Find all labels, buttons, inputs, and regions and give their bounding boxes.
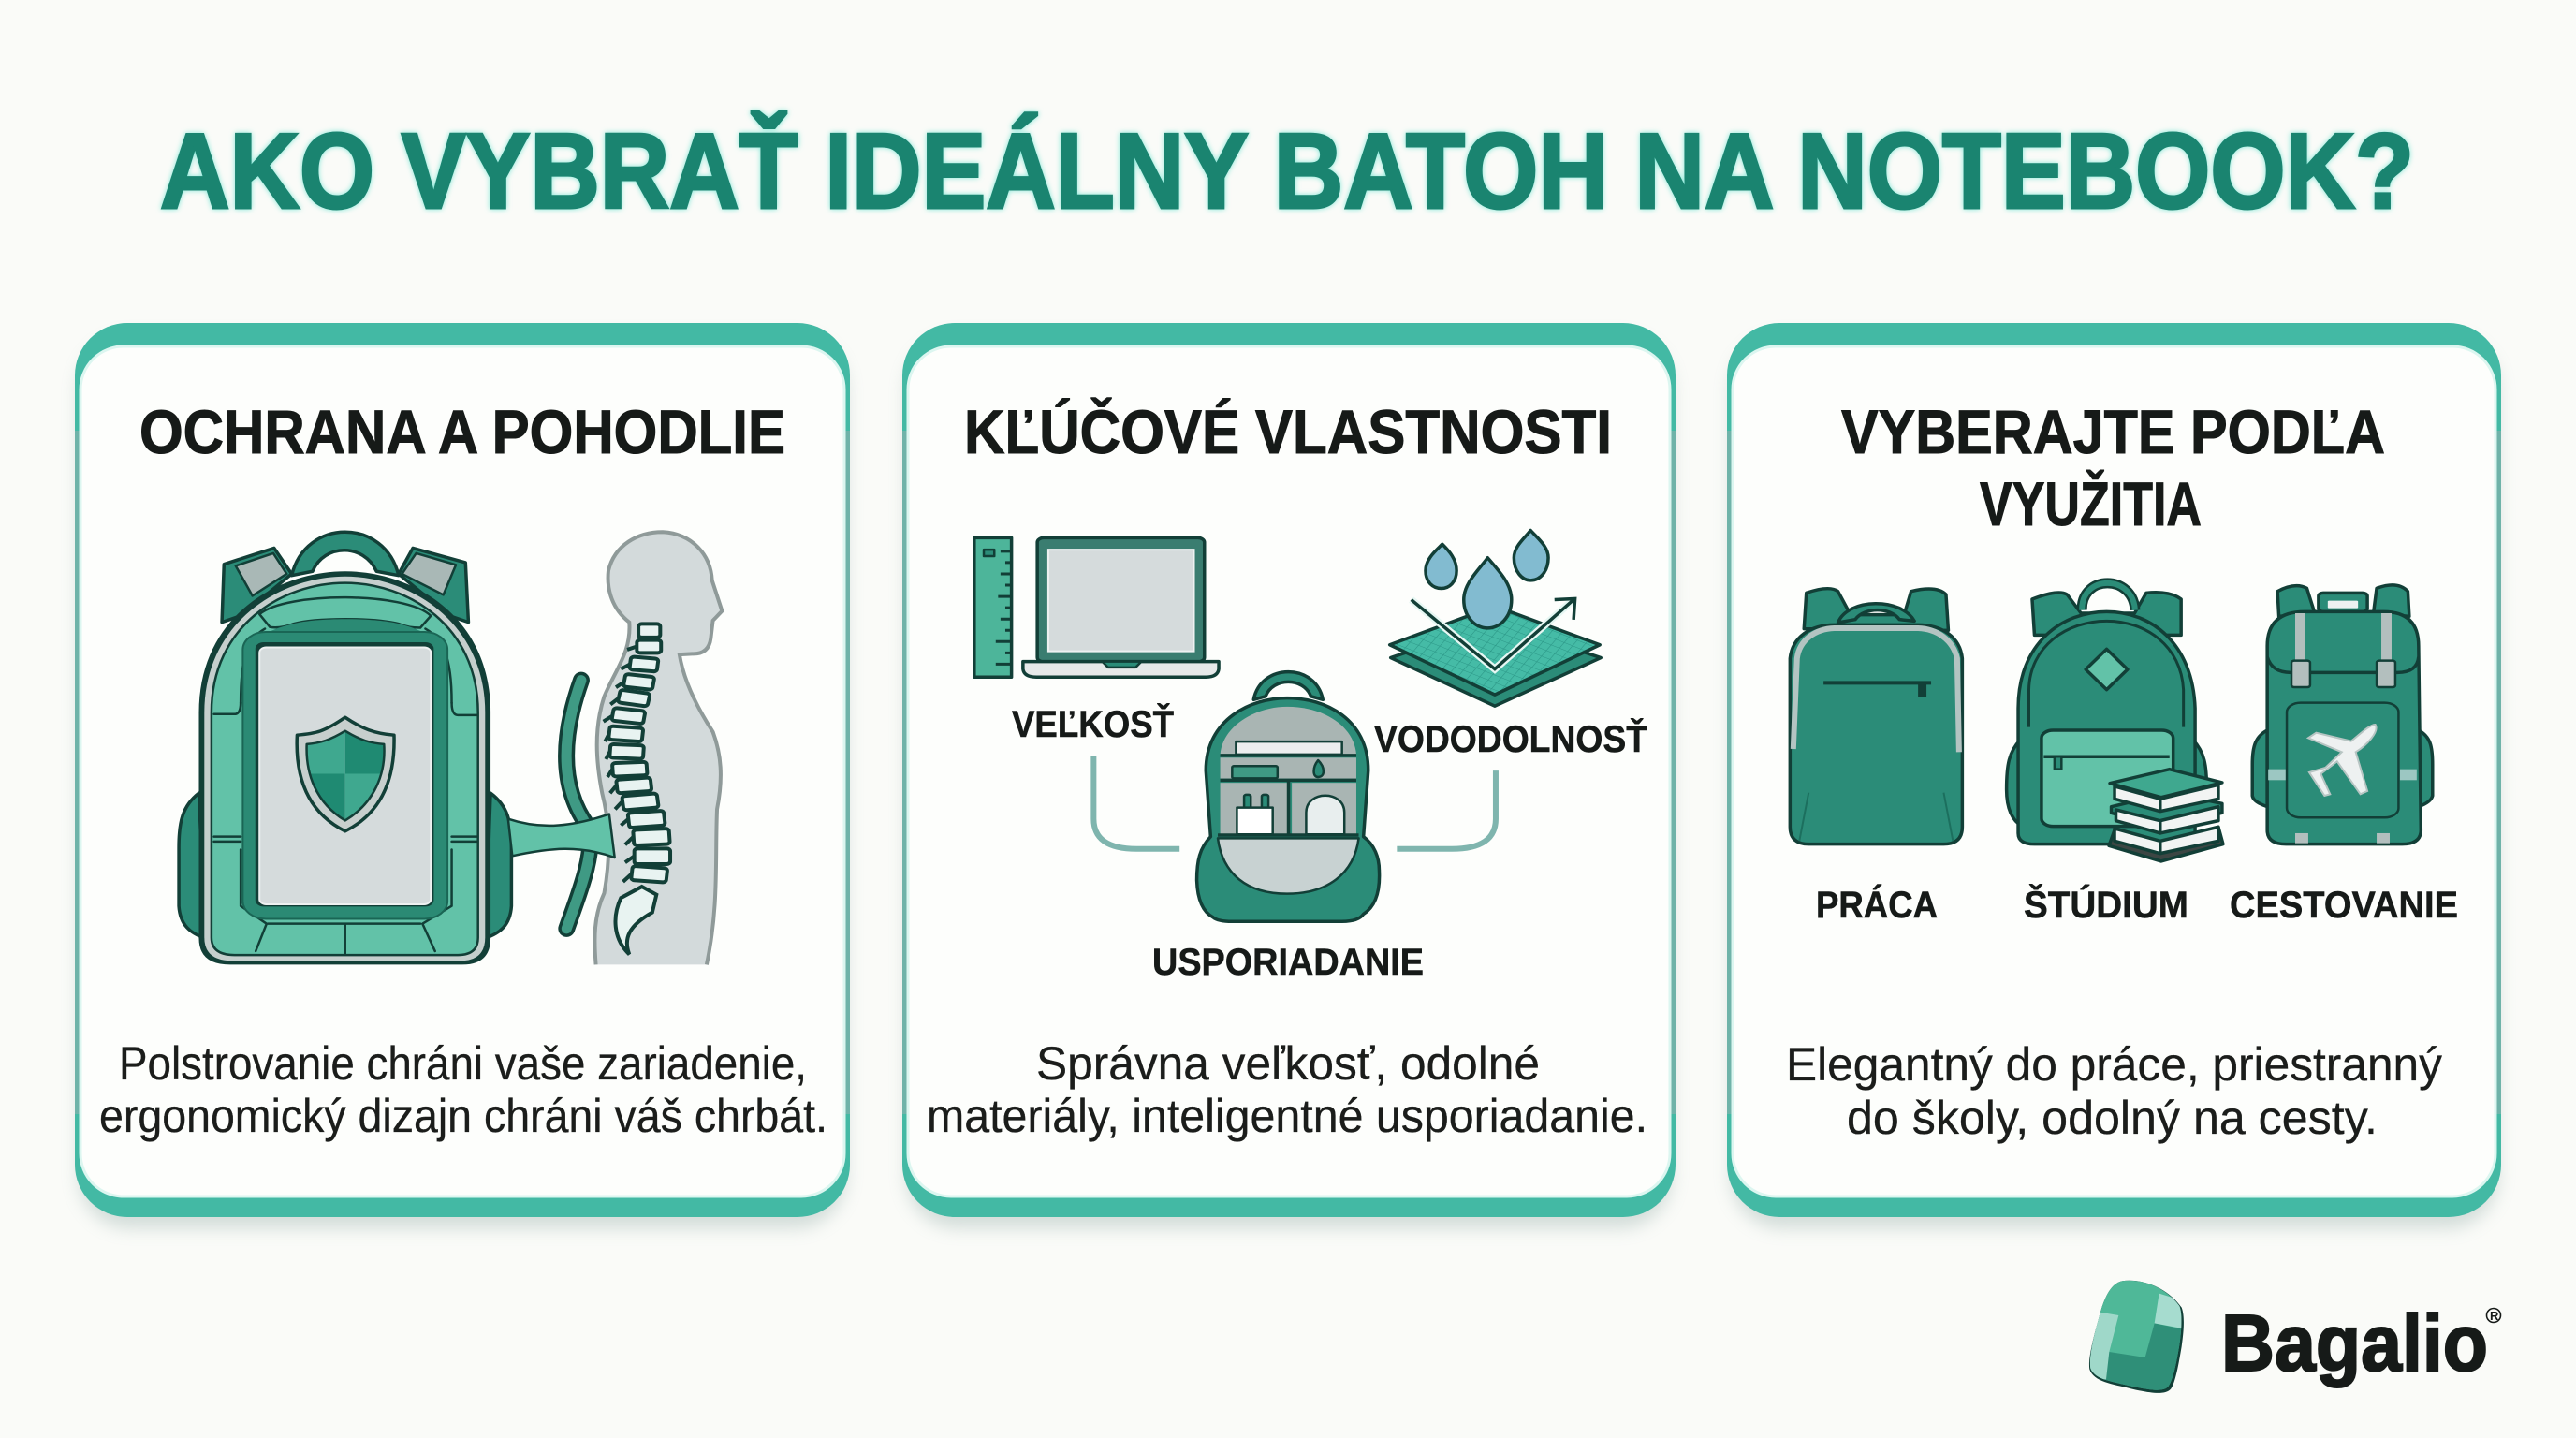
- label: usporiadanie: USPORIADANIE: [1152, 942, 1424, 983]
- icon: plane: [2308, 725, 2377, 796]
- panel: vyberajte podľa využitia: [1727, 323, 2501, 1228]
- logo: bagalio: [2089, 1281, 2501, 1393]
- icon: study backpack with books: [2007, 583, 2223, 861]
- human silhouette: [594, 532, 722, 964]
- connector left: [1093, 756, 1179, 849]
- heading: vyberajte podľa využitia: VYBERAJTE PODĽA: [1841, 397, 2385, 466]
- label: práca: PRÁCA: [1816, 884, 1938, 926]
- registered mark: R: [2490, 1309, 2499, 1323]
- panel: kľúčové vlastnosti: [902, 323, 1676, 1228]
- label: veľkosť: VEĽKOSŤ: [1012, 702, 1174, 745]
- icon: laptop: [1023, 537, 1219, 677]
- text block: vlastnosti description: [927, 1037, 1647, 1142]
- heading: vyberajte podľa využitia: [1841, 397, 2385, 538]
- icon: open backpack: [1197, 672, 1380, 921]
- illustration: three backpacks: [1790, 583, 2433, 861]
- icon: ruler: [974, 537, 1012, 677]
- illustration: features: [974, 530, 1601, 921]
- backpack body: [198, 571, 490, 964]
- spine: [604, 624, 670, 954]
- backpack straps and handle: [179, 532, 511, 938]
- text block: využitie description: Elegantný do práce, priestranný: [1786, 1038, 2442, 1091]
- label: štúdium: ŠTÚDIUM: [2024, 883, 2188, 926]
- ergonomic back support: [566, 681, 591, 929]
- text block: ochrana description: [99, 1037, 827, 1142]
- text block: vlastnosti description: Správna veľkosť, odolné: [1036, 1037, 1540, 1090]
- heading: ochrana a pohodlie: OCHRANA A POHODLIE: [139, 397, 785, 466]
- heading: kľúčové vlastnosti: KĽÚČOVÉ VLASTNOSTI: [964, 397, 1612, 466]
- icon: water resistant fabric: [1390, 530, 1601, 706]
- text block: využitie description: [1786, 1038, 2442, 1144]
- books: [2109, 770, 2223, 861]
- icon: travel backpack with plane: [2252, 585, 2433, 844]
- text block: vlastnosti description: materiály, inteligentné usporiadanie.: [927, 1090, 1647, 1142]
- label: cestovanie: CESTOVANIE: [2230, 885, 2458, 926]
- wordmark: Bagalio: [2221, 1299, 2488, 1388]
- text block: využitie description: do školy, odolný na cesty.: [1847, 1092, 2378, 1144]
- icon: work backpack: [1790, 589, 1962, 844]
- registered mark: [2486, 1309, 2501, 1323]
- connector right: [1397, 770, 1496, 849]
- icon: logo gem: [2089, 1281, 2184, 1393]
- label: vododolnosť: VODODOLNOSŤ: [1374, 717, 1647, 760]
- connector from backpack to spine: [508, 814, 615, 858]
- text block: ochrana description: Polstrovanie chráni vaše zariadenie,: [119, 1037, 807, 1090]
- illustration: backpack with shield and spine: [179, 532, 722, 964]
- text block: ochrana description: ergonomický dizajn chráni váš chrbát.: [99, 1090, 827, 1142]
- panel: ochrana a pohodlie: [75, 323, 850, 1228]
- icon: shield: [297, 717, 394, 831]
- heading: vyberajte podľa využitia: VYUŽITIA: [1980, 469, 2202, 538]
